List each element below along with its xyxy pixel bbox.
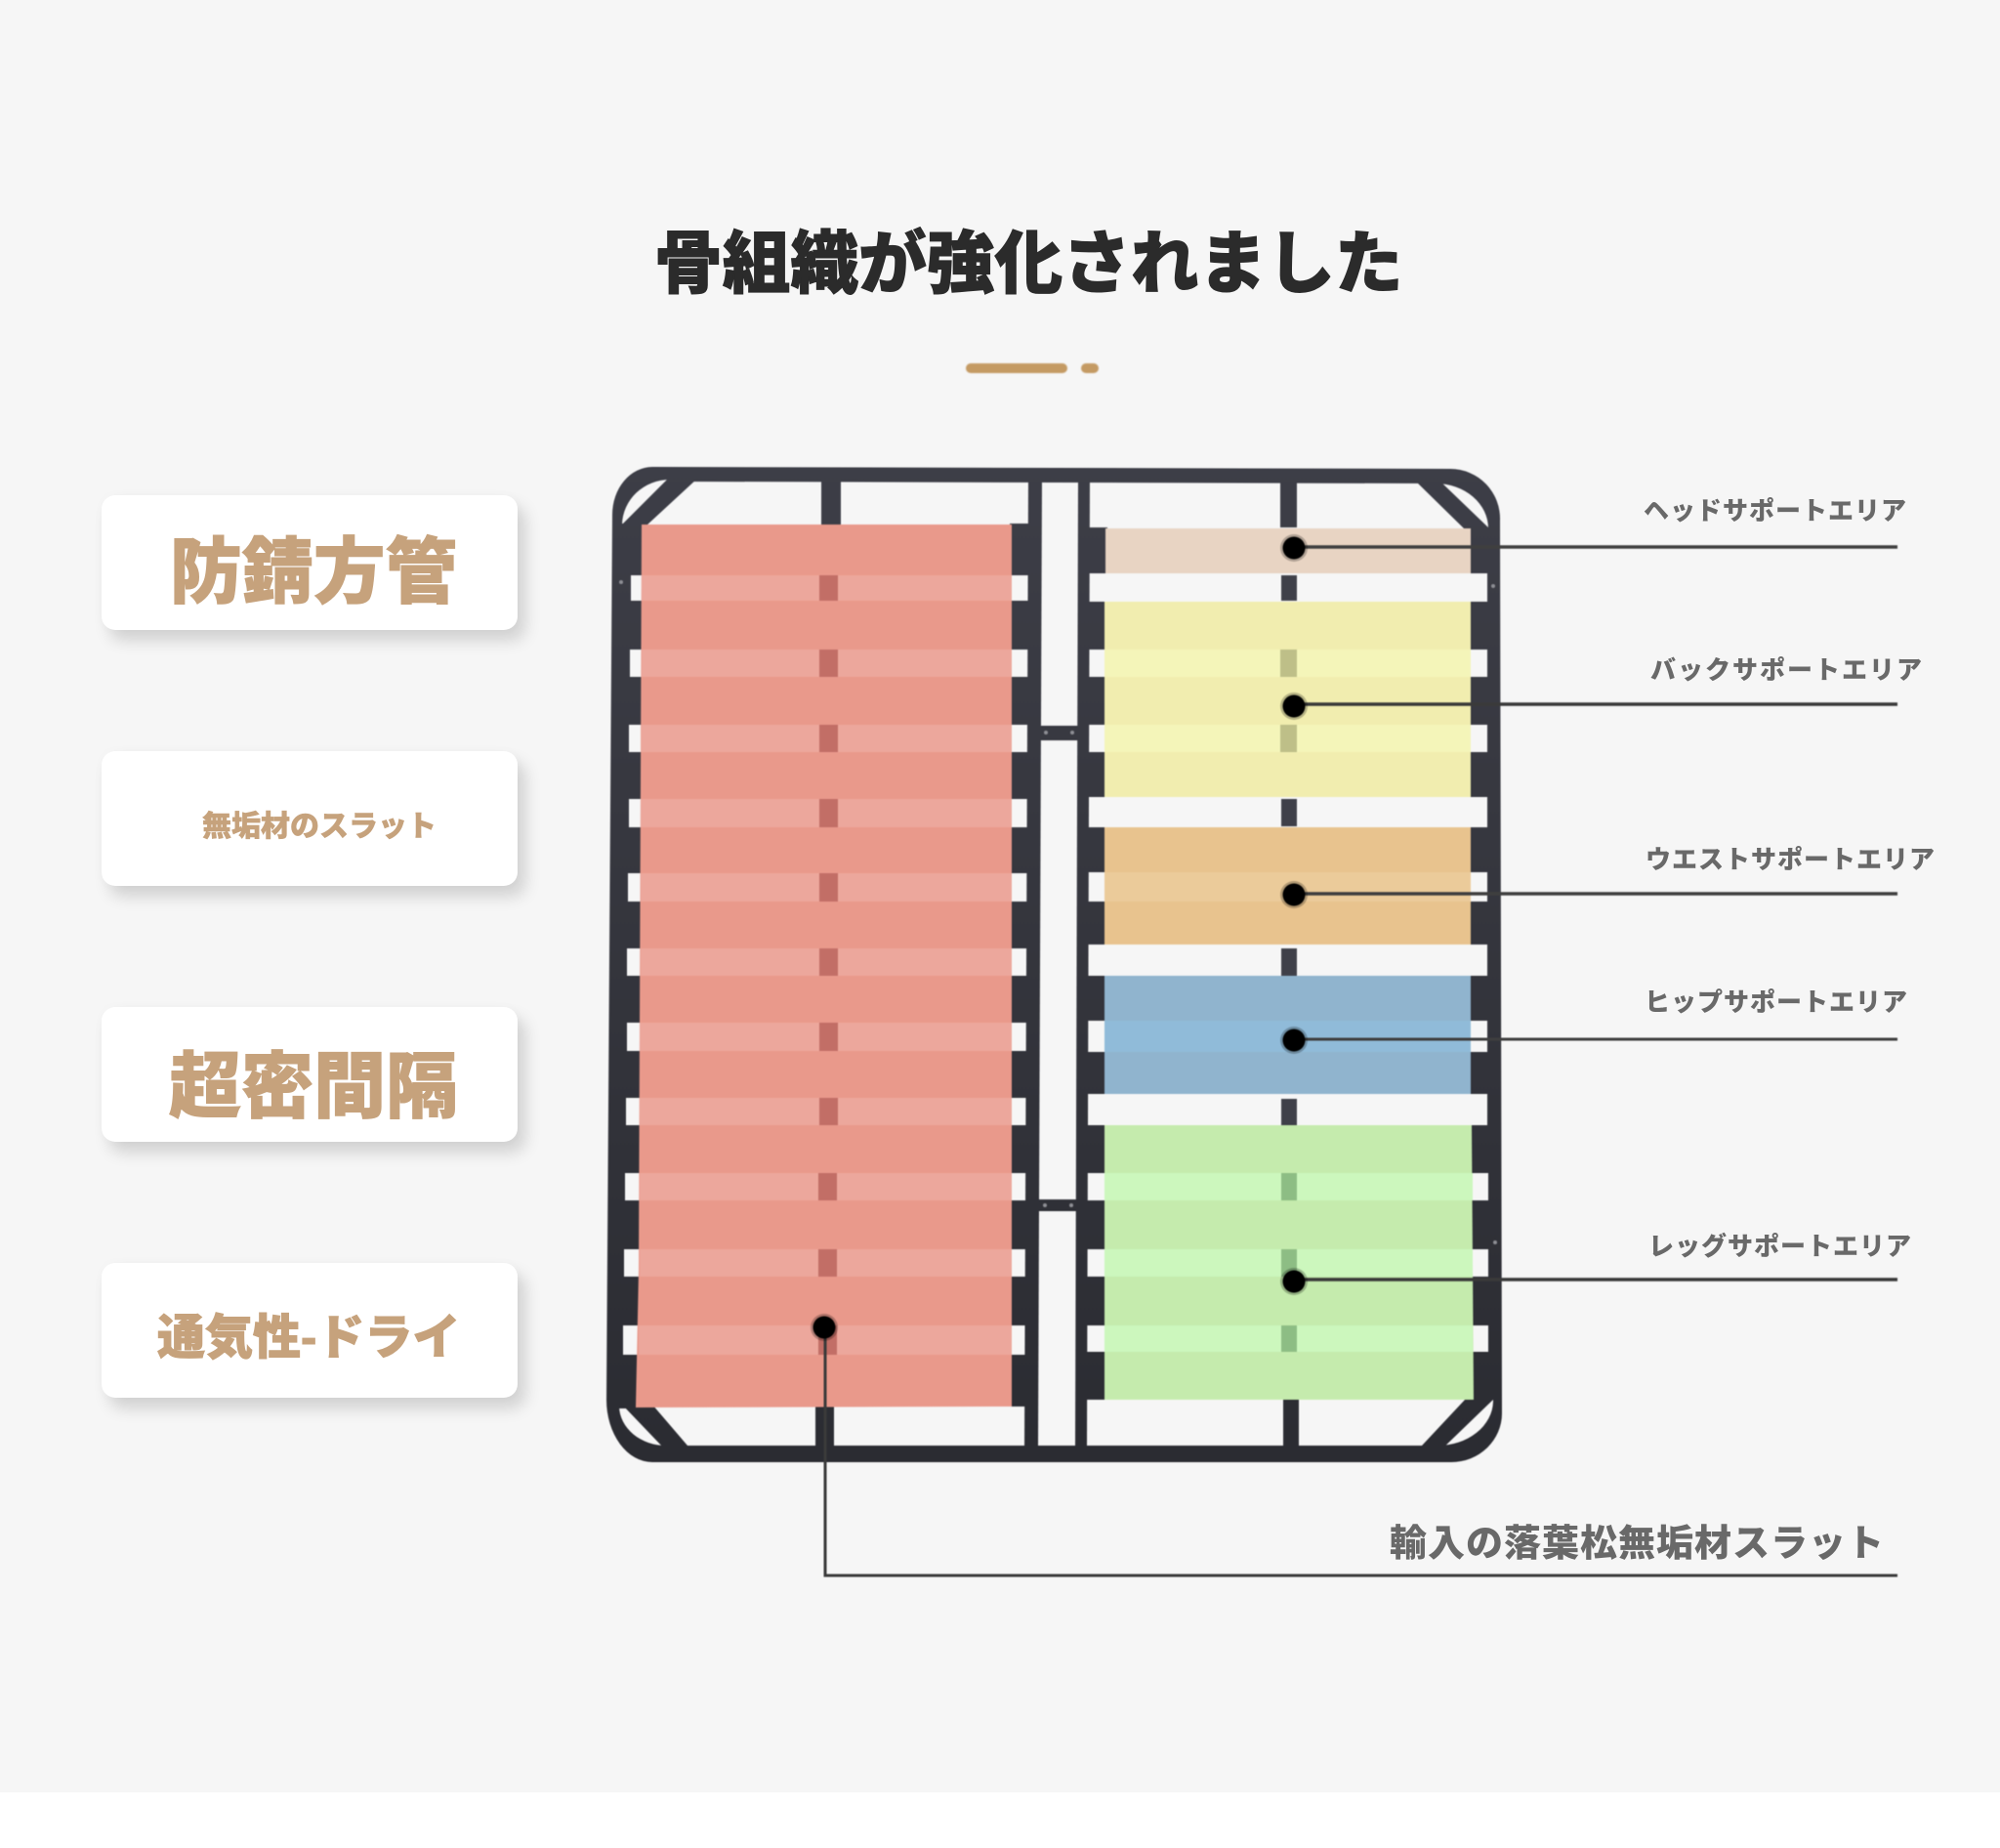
card: ultra-dense spacing [102, 1007, 518, 1142]
label: back support: バックサポートエリア [1650, 655, 1924, 685]
card: rust-proof square tube [102, 495, 518, 630]
leader: head [1280, 534, 1897, 562]
card: solid wood slats: 無垢材のスラット [202, 811, 437, 843]
leg zone [1104, 1125, 1474, 1400]
card: ultra-dense spacing: 超密間隔 [169, 1046, 458, 1127]
salmon slat area [636, 525, 1012, 1407]
leader: larch slats [811, 1314, 1897, 1575]
leader: leg [1280, 1268, 1897, 1295]
leader: hip [1280, 1027, 1897, 1054]
back zone [1104, 602, 1471, 797]
card: breathable and dry [102, 1263, 518, 1398]
right panel posts in open gaps [1281, 575, 1297, 1125]
card: solid wood slats [102, 751, 518, 886]
title: 骨組織が強化されました [654, 226, 1403, 302]
outer steel frame [606, 467, 1502, 1462]
rivets [619, 580, 1497, 1244]
head zone [1105, 528, 1471, 573]
label: leg support: レッグサポートエリア [1648, 1232, 1912, 1261]
label: hip support: ヒップサポートエリア [1645, 987, 1908, 1017]
card: breathable and dry: 通気性-ドライ [157, 1312, 460, 1365]
label: imported larch solid wood slats: 輸入の落葉松無垢材スラット [1390, 1524, 1885, 1565]
top and bottom center posts [815, 479, 1299, 1448]
dark slat bearing blocks [609, 524, 1494, 1408]
leader: waist [1280, 881, 1897, 908]
waist zone [1104, 827, 1471, 945]
central double rails [1024, 479, 1090, 1448]
label: head support: ヘッドサポートエリア [1644, 496, 1907, 525]
card: rust-proof square tube: 防錆方管 [170, 531, 457, 612]
gaps between slats [623, 573, 1488, 1355]
label: waist support: ウエストサポートエリア [1646, 845, 1936, 874]
hip zone [1104, 976, 1471, 1094]
corner braces [621, 477, 1494, 1451]
leader: back [1280, 693, 1897, 720]
